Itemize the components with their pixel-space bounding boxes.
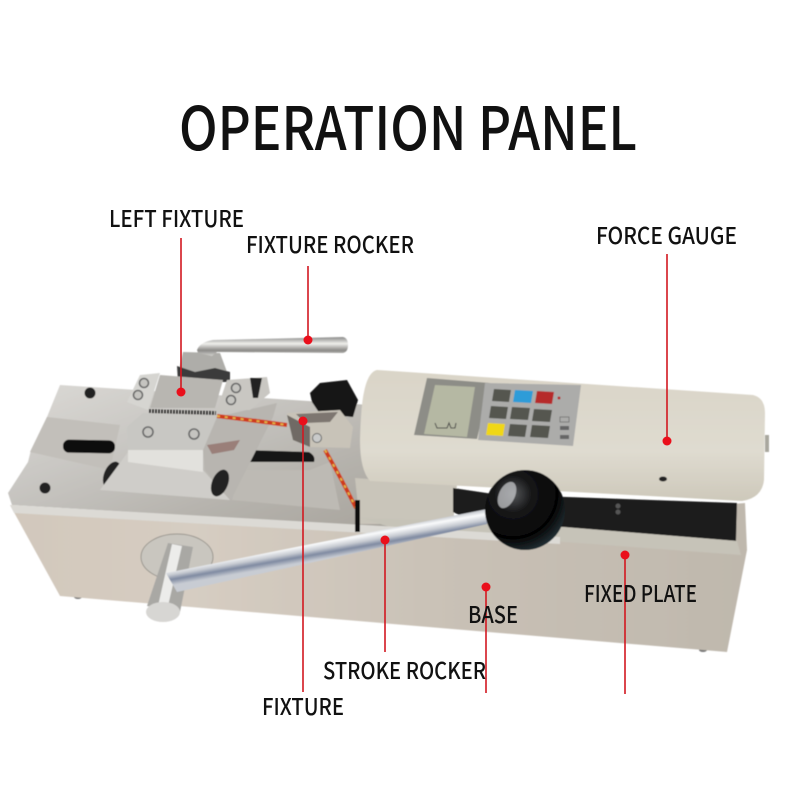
leader line: stroke rocker — [380, 536, 390, 652]
label: left fixture: LEFT FIXTURE — [109, 200, 244, 234]
block right side — [203, 403, 277, 500]
wire twisted lower — [325, 450, 356, 508]
lower block bright band — [128, 450, 203, 472]
small slot right repeat — [207, 467, 233, 499]
label: force gauge: FORCE GAUGE — [596, 217, 737, 251]
fixed plate dark rail — [453, 488, 737, 541]
slot small right — [207, 467, 233, 499]
leader line: fixture rocker — [304, 266, 312, 344]
top plate step shading — [30, 417, 120, 470]
slot small left — [99, 459, 125, 491]
black ball handle — [485, 470, 565, 550]
dark pin — [250, 378, 262, 398]
machine illustration — [8, 337, 769, 652]
leader line: base — [482, 582, 490, 693]
stroke rocker post — [147, 543, 193, 612]
lower block plate — [100, 452, 230, 500]
base feet — [74, 595, 707, 652]
ball highlight — [494, 479, 520, 511]
moving fixture — [287, 410, 353, 448]
slot left — [63, 440, 115, 453]
label: stroke rocker: STROKE ROCKER — [323, 652, 486, 686]
gauge LCD — [424, 385, 475, 437]
gauge hole — [659, 476, 667, 482]
block front face — [127, 413, 217, 450]
title: OPERATION PANEL — [179, 81, 637, 168]
leader line: force gauge — [662, 254, 672, 446]
fixture teeth — [149, 411, 216, 413]
gauge body — [360, 370, 765, 501]
label: fixed plate: FIXED PLATE — [584, 575, 697, 609]
block shadow with red reflection — [207, 440, 240, 454]
gauge end clip — [765, 435, 769, 452]
right screw plate — [217, 377, 270, 410]
label: fixture: FIXTURE — [262, 688, 344, 722]
wire twisted upper — [217, 416, 287, 425]
base top plate — [8, 385, 400, 528]
stroke rocker bar — [166, 509, 487, 592]
leader line: left fixture — [176, 238, 186, 396]
gauge screen bezel — [414, 378, 490, 439]
label: fixture rocker: FIXTURE ROCKER — [246, 226, 414, 260]
left screw plate — [127, 373, 160, 410]
keypad buttons — [486, 389, 569, 439]
base front face — [10, 503, 747, 652]
wire end — [355, 500, 360, 532]
rail screw — [616, 504, 620, 514]
stroke rocker pivot — [141, 534, 213, 580]
leader line: fixture — [298, 416, 308, 692]
label: base: BASE — [468, 596, 518, 630]
rail lower strip — [360, 518, 741, 555]
upper channel — [355, 478, 457, 524]
rocker bracket — [177, 352, 230, 380]
fixture screws — [134, 378, 240, 439]
leader line: fixed plate — [620, 550, 630, 694]
black star knob — [310, 380, 358, 417]
bolt holes — [84, 388, 96, 398]
gauge keypad panel — [478, 383, 581, 446]
fixture rocker handle — [197, 337, 348, 356]
LCD graph — [435, 423, 456, 428]
jaw top face — [150, 375, 223, 408]
slot center — [240, 450, 314, 462]
top edge highlight — [10, 505, 560, 544]
lower side rail — [232, 462, 340, 510]
